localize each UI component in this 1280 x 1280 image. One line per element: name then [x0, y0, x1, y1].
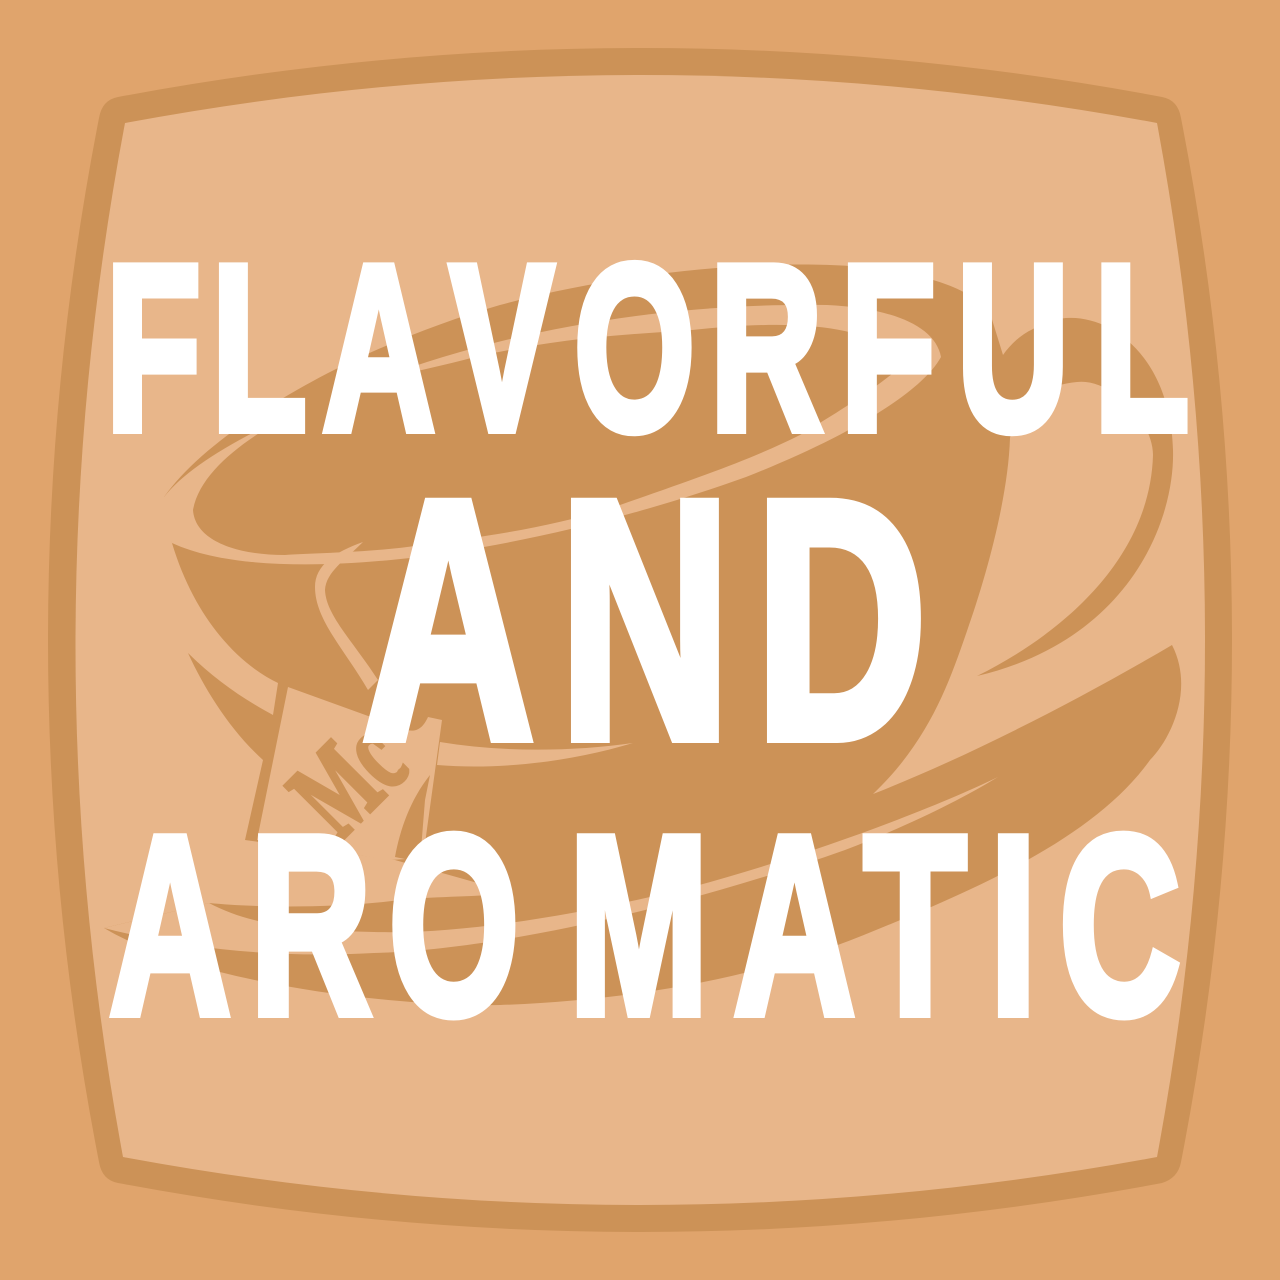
badge panel — [75, 75, 1205, 1205]
rim highlight ring — [164, 305, 941, 564]
tag fold — [395, 775, 430, 862]
steam string — [315, 542, 378, 690]
tag logo: Mc — [266, 697, 429, 861]
title line 2: AND — [363, 431, 927, 810]
title line 1: FLAVORFUL — [106, 218, 1189, 480]
saucer gap under tag — [437, 742, 633, 766]
tag registered mark: ® — [397, 765, 407, 780]
coffee surface — [193, 325, 909, 555]
tag fill — [257, 687, 442, 860]
icon: coffee cup on saucer — [104, 265, 1181, 1005]
cup, handle and saucer silhouette — [104, 265, 1181, 1005]
saucer highlight stripe — [104, 777, 998, 954]
title: flavorful and aromatic — [106, 218, 1189, 1067]
title line 3: AROMATIC — [110, 783, 1180, 1067]
